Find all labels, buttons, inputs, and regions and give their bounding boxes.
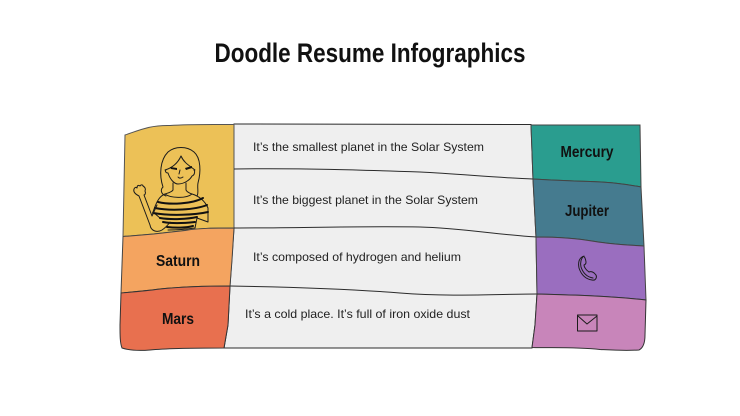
icon: phone [579,256,596,280]
panel: Saturn cell: Saturn [156,253,200,270]
text: Jupiter description: It’s the biggest planet in the Solar System [253,193,478,207]
icon: envelope [578,315,597,331]
dividers [234,169,533,179]
title: Doodle Resume Infographics [214,38,526,68]
text: Mars description: It’s a cold place. It’s full of iron oxide dust [245,307,471,321]
eyes and mouth [170,166,192,170]
neck and collar [165,183,192,197]
shirt stripes [153,198,208,228]
panel: Jupiter cell: Jupiter [565,203,609,220]
panel: Saturn cell [121,228,234,293]
text: Saturn description: It’s composed of hydrogen and helium [253,250,461,264]
panel: resume table [120,124,646,350]
arm and waving hand [134,185,170,231]
shirt outline [153,194,208,230]
panel: Mars cell [120,286,230,350]
panel: central text area [224,124,537,348]
face [165,170,195,184]
panel: Mercury cell: Mercury [560,144,614,161]
text: Mercury description: It’s the smallest planet in the Solar System [253,140,484,154]
panel: Jupiter cell [533,179,644,246]
panel: Mars cell: Mars [162,311,194,328]
illustration: woman with striped shirt waving [134,148,208,231]
panel: Mercury cell [531,125,641,187]
panel: mail cell [532,294,646,350]
hair [161,148,200,196]
panel: photo cell [123,124,234,236]
panel: phone cell [536,237,646,300]
